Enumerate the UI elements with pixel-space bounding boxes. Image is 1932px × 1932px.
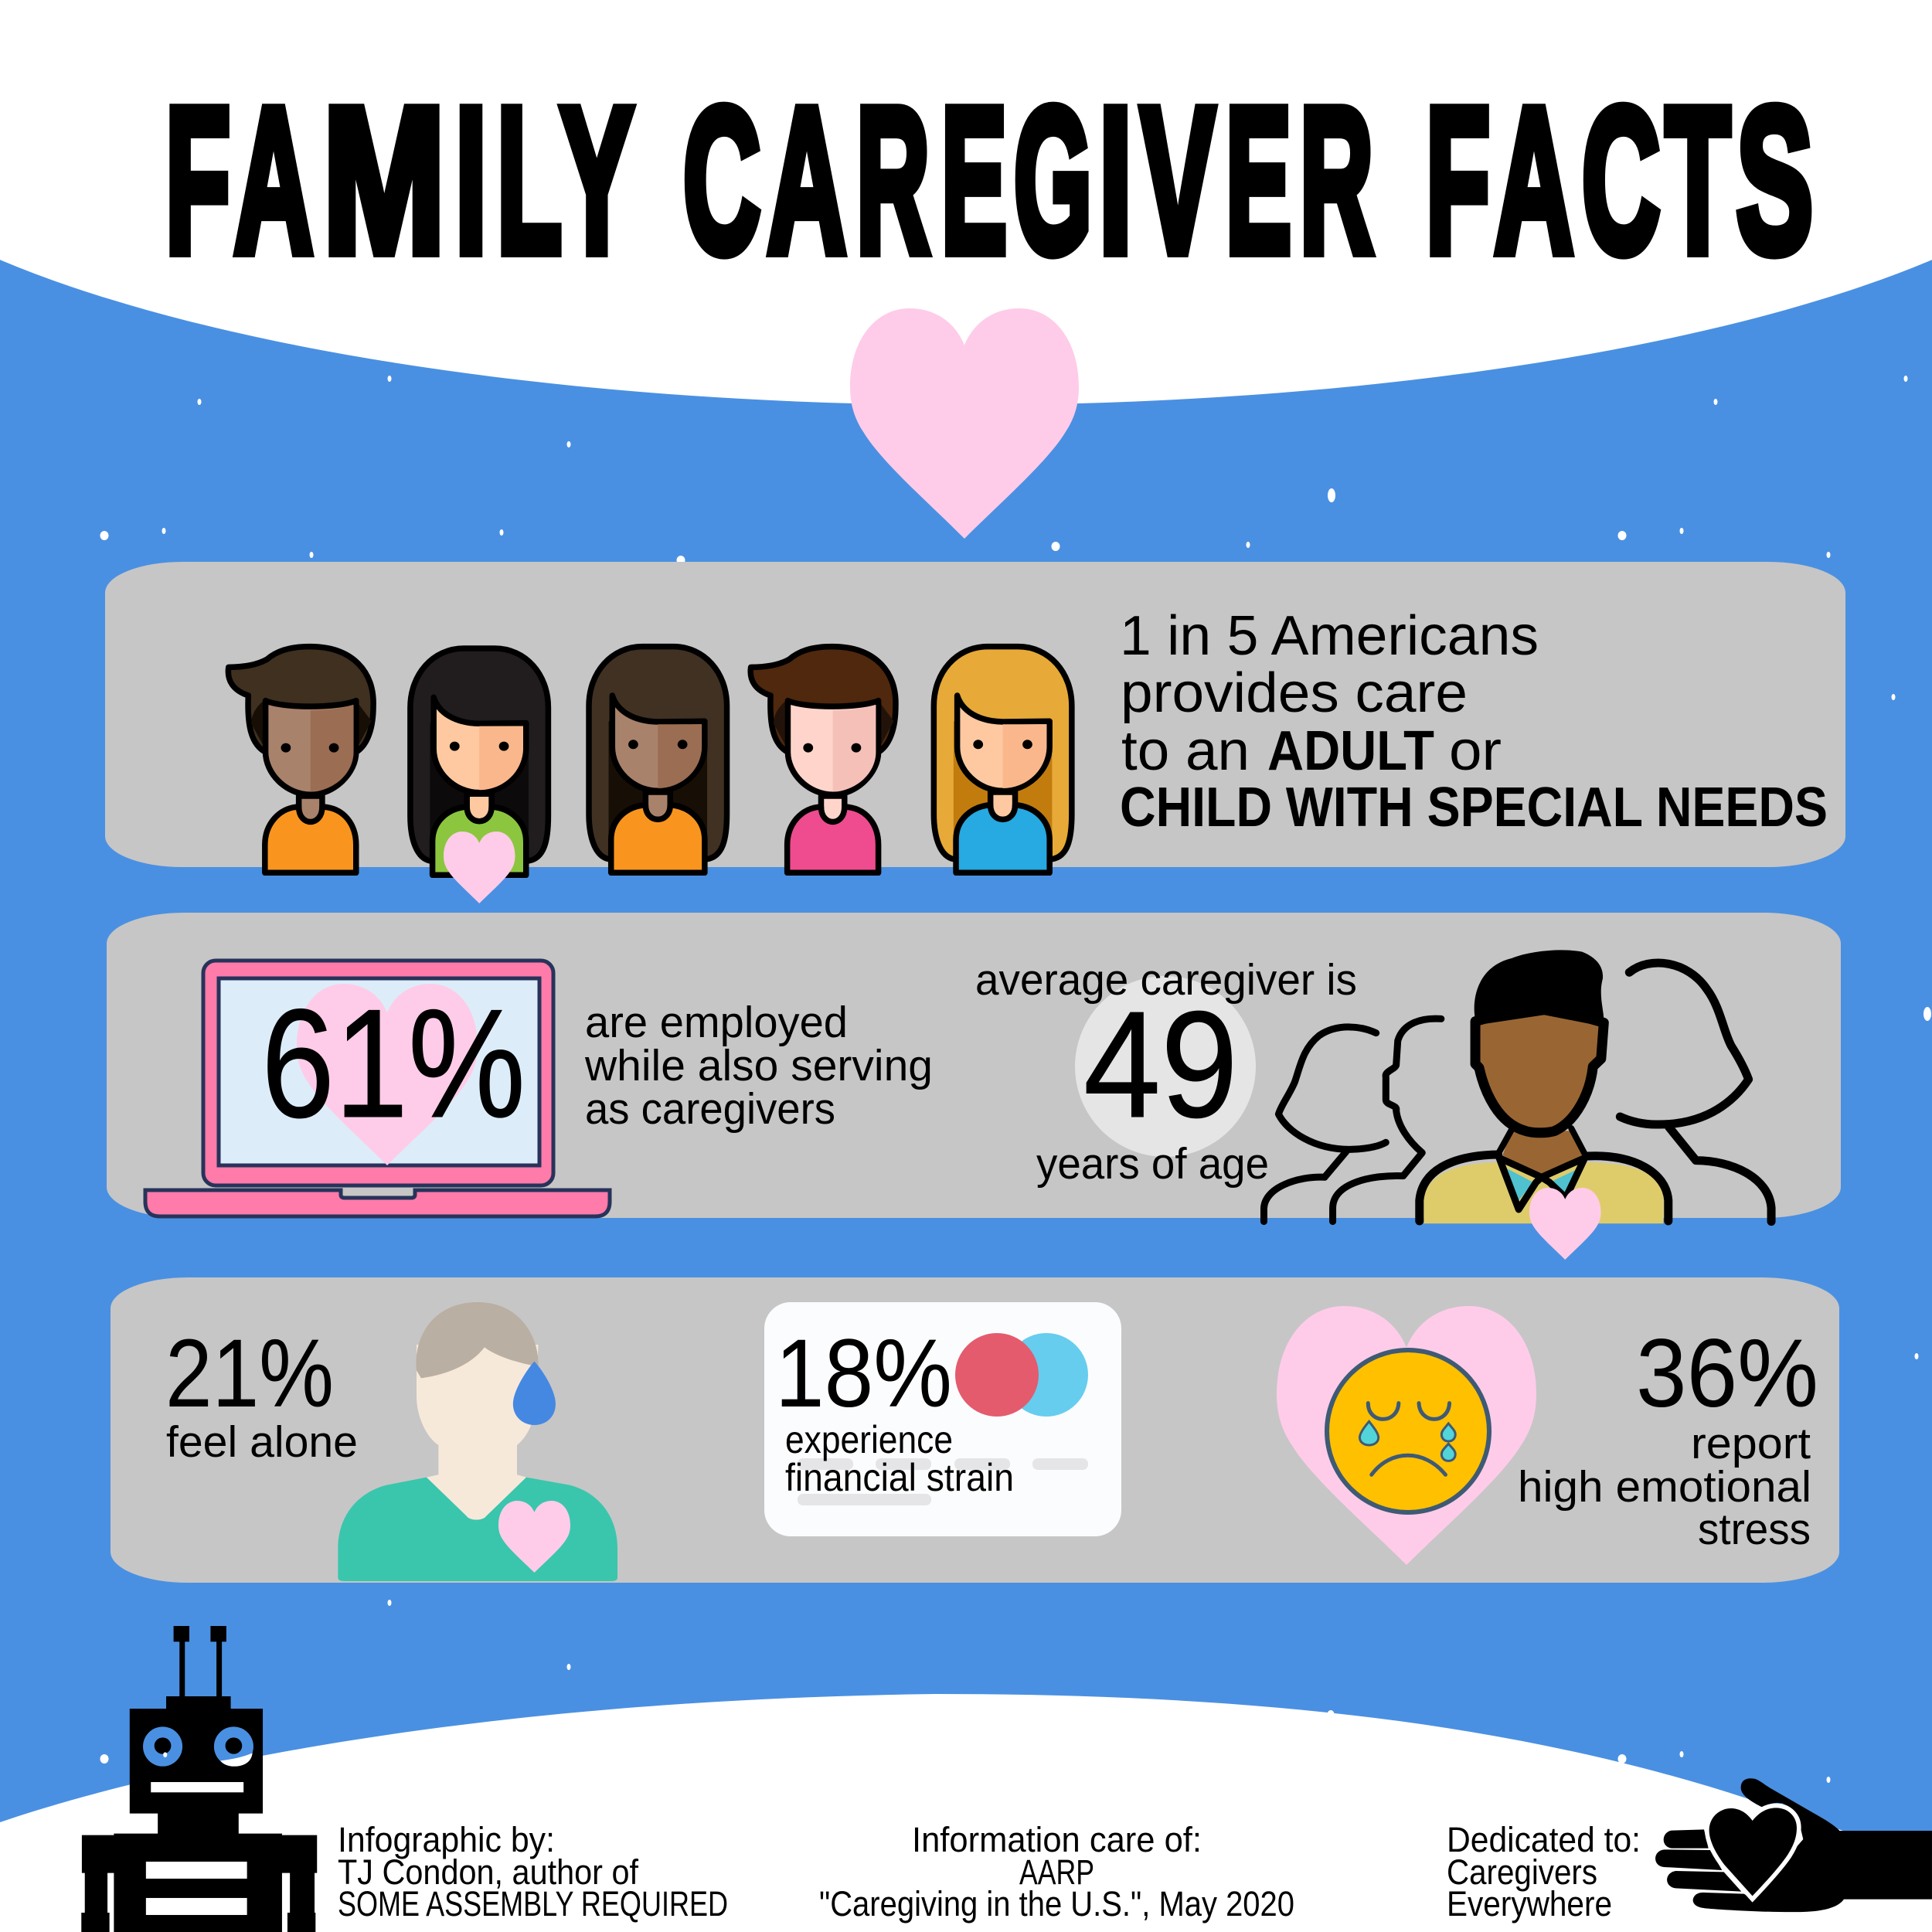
- person 1: [228, 647, 373, 872]
- text: infographic credit: SOME ASSEMBLY REQUIRED: [338, 1884, 728, 1923]
- text: employed: are employed: [585, 998, 848, 1047]
- white top arc: [0, 0, 1932, 405]
- text: dedication: Everywhere: [1447, 1884, 1612, 1923]
- title: R: [856, 65, 930, 295]
- icon: robot: [81, 1626, 317, 1932]
- person 2: [410, 648, 548, 875]
- text: emotional stress: stress: [1698, 1505, 1811, 1554]
- text: information source: [819, 1820, 1294, 1923]
- text: years of age: years of age: [1036, 1139, 1269, 1189]
- text: infographic credit: [338, 1820, 728, 1923]
- panel: alone, strain, stress: [111, 1277, 1839, 1583]
- text: 1 in 5 Americans: [1120, 605, 1828, 838]
- stat: 36%: 36%: [1636, 1320, 1818, 1427]
- text: 1 in 5 Americans: CHILD WITH SPECIAL NEEDS: [1120, 777, 1828, 838]
- text: employed: [584, 998, 933, 1134]
- text: dedication: Dedicated to:: [1447, 1820, 1641, 1859]
- icon: crying person: [338, 1302, 617, 1581]
- title: F: [165, 65, 230, 295]
- icon: shirt heart: [498, 1501, 570, 1573]
- icon: stress heart: [1277, 1306, 1536, 1565]
- panel: 1 in 5 Americans: [105, 562, 1845, 903]
- stat: 49: 49: [1083, 980, 1238, 1149]
- icon: crying face: [1327, 1350, 1489, 1512]
- text: information source: "Caregiving in the U.S.", May 2020: [819, 1884, 1294, 1923]
- text: employed: as caregivers: [585, 1084, 835, 1134]
- title: I: [1099, 65, 1132, 295]
- text: information source: Information care of:: [912, 1820, 1202, 1859]
- text: infographic credit: TJ Condon, author of: [338, 1852, 638, 1892]
- white bottom arc: [0, 1694, 1932, 1932]
- card placeholder bars: [798, 1458, 1088, 1505]
- text: emotional stress: report: [1691, 1419, 1811, 1468]
- text: 1 in 5 Americans: to an: [1121, 720, 1250, 782]
- text: 1 in 5 Americans: ADULT: [1267, 720, 1434, 782]
- text: financial strain: financial strain: [785, 1456, 1014, 1499]
- title: Y: [560, 65, 632, 295]
- title: E: [1226, 65, 1291, 295]
- text: financial strain: experience: [785, 1418, 953, 1461]
- title: A: [234, 65, 313, 295]
- person 3: [589, 647, 727, 872]
- text: 1 in 5 Americans: 1 in 5 Americans: [1120, 605, 1539, 667]
- icon: laptop heart: [297, 984, 478, 1165]
- title: I: [455, 65, 487, 295]
- card logo circles: [955, 1333, 1088, 1417]
- title: F: [1426, 65, 1490, 295]
- title: C: [1582, 65, 1660, 295]
- icon: heart on person 2: [444, 832, 515, 903]
- title: C: [683, 65, 760, 295]
- text: employed: while also serving: [584, 1041, 933, 1090]
- text: feel alone: feel alone: [166, 1417, 358, 1467]
- text: financial strain: [785, 1418, 1014, 1499]
- text: emotional stress: high emotional: [1518, 1462, 1811, 1512]
- text: 1 in 5 Americans: provides care: [1121, 662, 1468, 724]
- age circle: [1075, 976, 1256, 1157]
- title: G: [1014, 65, 1092, 295]
- title: M: [323, 65, 445, 295]
- icon: hand holding heart: [1655, 1778, 1932, 1912]
- stat: 61%: 61%: [261, 978, 526, 1150]
- text: 1 in 5 Americans: or: [1449, 720, 1502, 782]
- person 4: [750, 647, 896, 872]
- text: average caregiver: average caregiver is: [975, 955, 1357, 1005]
- title: V: [1141, 65, 1216, 295]
- text: dedication: Caregivers: [1447, 1852, 1597, 1892]
- text: infographic credit: Infographic by:: [338, 1820, 555, 1859]
- icon: caregiver group: [1264, 950, 1771, 1223]
- title: E: [941, 65, 1007, 295]
- title: T: [1665, 65, 1730, 295]
- stat: 21%: 21%: [165, 1320, 334, 1427]
- title: L: [497, 65, 562, 295]
- icon: top pink heart: [850, 308, 1079, 539]
- stat: 18%: 18%: [775, 1320, 952, 1427]
- title: S: [1736, 65, 1813, 295]
- background stars: [100, 376, 1931, 1783]
- title: R: [1300, 65, 1373, 295]
- title: A: [1495, 65, 1573, 295]
- five people icons: [228, 647, 1072, 875]
- text: information source: AARP: [1019, 1852, 1094, 1892]
- person 5: [934, 647, 1072, 872]
- card: financial strain: [764, 1302, 1121, 1536]
- text: dedication: [1447, 1820, 1641, 1923]
- title: A: [767, 65, 846, 295]
- text: emotional stress: [1518, 1419, 1811, 1554]
- icon: caregiver heart: [1529, 1188, 1601, 1260]
- icon: laptop: [145, 961, 610, 1216]
- panel: employment and age: [107, 913, 1841, 1260]
